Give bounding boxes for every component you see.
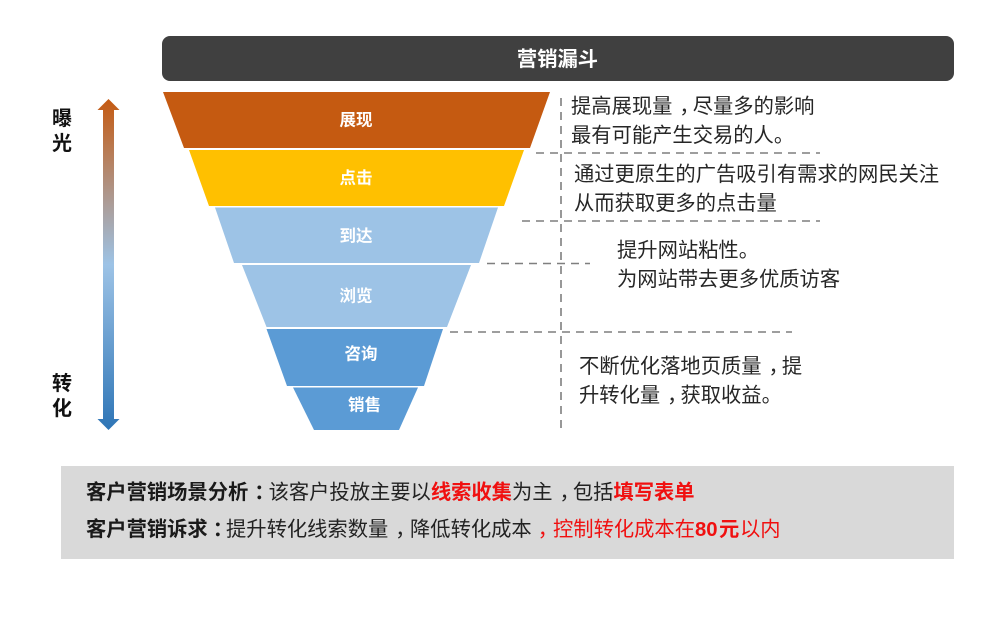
arrow: exposure to conversion (98, 99, 120, 430)
text: customer demand: ， (395, 519, 416, 541)
text: impressions note: 提高展现量 ，尽量多的影响 (571, 95, 814, 118)
text: customer demand: 元 (719, 519, 739, 541)
text: customer demand: ， (538, 519, 558, 541)
funnel stage: inquiry (266, 329, 443, 386)
funnel stage: sales: 销售 (348, 396, 381, 414)
text: clicks note: 从而获取更多的点击量 (574, 192, 777, 215)
funnel stage: clicks: 点击 (340, 168, 372, 188)
funnel stage: arrivals (215, 208, 498, 263)
panel: customer analysis (61, 466, 954, 559)
text: customer demand: 客户营销诉求： (86, 519, 233, 541)
label: conversion (52, 372, 72, 420)
text: site stickiness note: 提升网站粘性。 (617, 239, 759, 262)
text: impressions note (571, 95, 814, 147)
title bar (162, 36, 954, 81)
label: conversion: 转 (52, 372, 72, 395)
text: scenario analysis: 客户营销场景分析 ：该客户投放主要以线索收集为主 ，包括填写表单 (86, 480, 695, 504)
label: conversion: 化 (52, 397, 72, 420)
funnel stage: browsing: 浏览 (340, 286, 372, 306)
label: exposure (52, 108, 72, 155)
text: clicks note: 通过更原生的广告吸引有需求的网民关注 (574, 163, 939, 186)
funnel stage: browsing (242, 265, 471, 327)
funnel (163, 92, 550, 430)
label: exposure: 光 (52, 132, 72, 155)
title bar: 营销漏斗 (517, 48, 598, 71)
text: customer demand: 以内 (740, 518, 781, 541)
text: site stickiness note: 为网站带去更多优质访客 (617, 268, 840, 291)
funnel stage: arrivals: 到达 (340, 226, 373, 246)
funnel stage: impressions (163, 92, 550, 148)
dashed guide lines (450, 98, 820, 432)
text: clicks note (574, 163, 939, 215)
funnel stage: inquiry: 咨询 (344, 344, 378, 364)
label: exposure: 曝 (52, 108, 72, 130)
text: site stickiness note (617, 239, 840, 291)
text: customer demand: 降低转化成本 (410, 518, 532, 541)
funnel stage: sales (293, 388, 418, 430)
text: customer demand: 80 (695, 519, 718, 541)
funnel stage: clicks (189, 150, 524, 206)
text: landing page note: 升转化量 ，获取收益。 (579, 384, 782, 407)
text: impressions note: 最有可能产生交易的人。 (571, 124, 794, 147)
text: customer demand: 控制转化成本在 (553, 518, 695, 541)
text: customer demand: 提升转化线索数量 (226, 518, 388, 541)
funnel stage: impressions: 展现 (340, 112, 373, 130)
text: landing page note (579, 355, 802, 407)
text: landing page note: 不断优化落地页质量 ，提 (579, 355, 802, 378)
